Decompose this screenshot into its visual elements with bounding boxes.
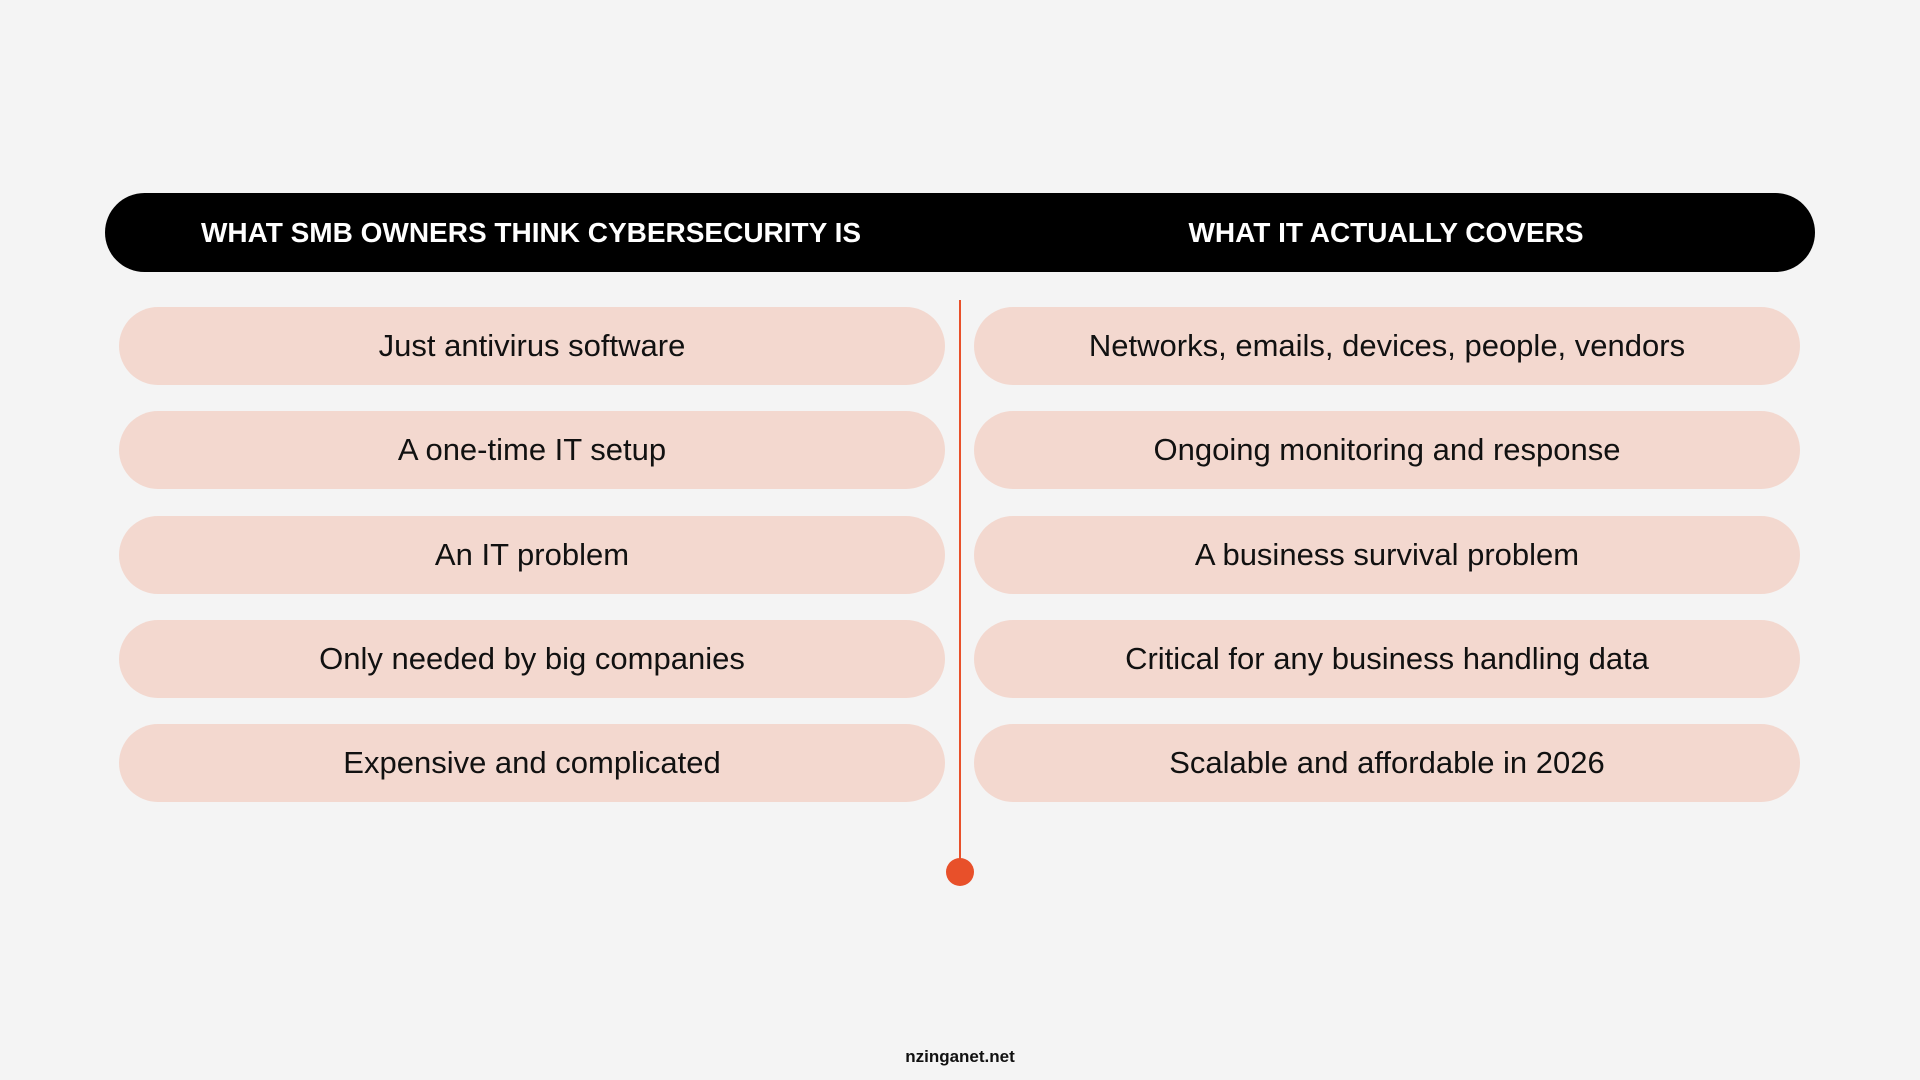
reality 1 (974, 307, 1800, 385)
footer: nzinganet.net (905, 1047, 1015, 1066)
reality 2: Ongoing monitoring and response (1153, 432, 1621, 467)
myth 2: A one-time IT setup (398, 432, 666, 467)
myth 4: Only needed by big companies (319, 641, 745, 676)
divider end dot (946, 858, 974, 886)
reality 3: A business survival problem (1195, 537, 1579, 572)
reality 4 (974, 620, 1800, 698)
header: right column: WHAT IT ACTUALLY COVERS (1188, 217, 1584, 248)
center divider line (959, 300, 961, 872)
myth 3: An IT problem (435, 537, 629, 572)
header bar (105, 193, 1815, 272)
myth 1 (119, 307, 945, 385)
myth 3 (119, 516, 945, 594)
myth 1: Just antivirus software (379, 328, 685, 363)
reality 5: Scalable and affordable in 2026 (1169, 745, 1605, 780)
reality 1: Networks, emails, devices, people, vendors (1089, 328, 1685, 363)
myth 4 (119, 620, 945, 698)
reality 3 (974, 516, 1800, 594)
reality 2 (974, 411, 1800, 489)
myth 2 (119, 411, 945, 489)
header: left column: WHAT SMB OWNERS THINK CYBERSECURITY IS (201, 217, 861, 248)
reality 5 (974, 724, 1800, 802)
myth 5 (119, 724, 945, 802)
reality 4: Critical for any business handling data (1125, 641, 1649, 676)
myth 5: Expensive and complicated (343, 745, 721, 780)
